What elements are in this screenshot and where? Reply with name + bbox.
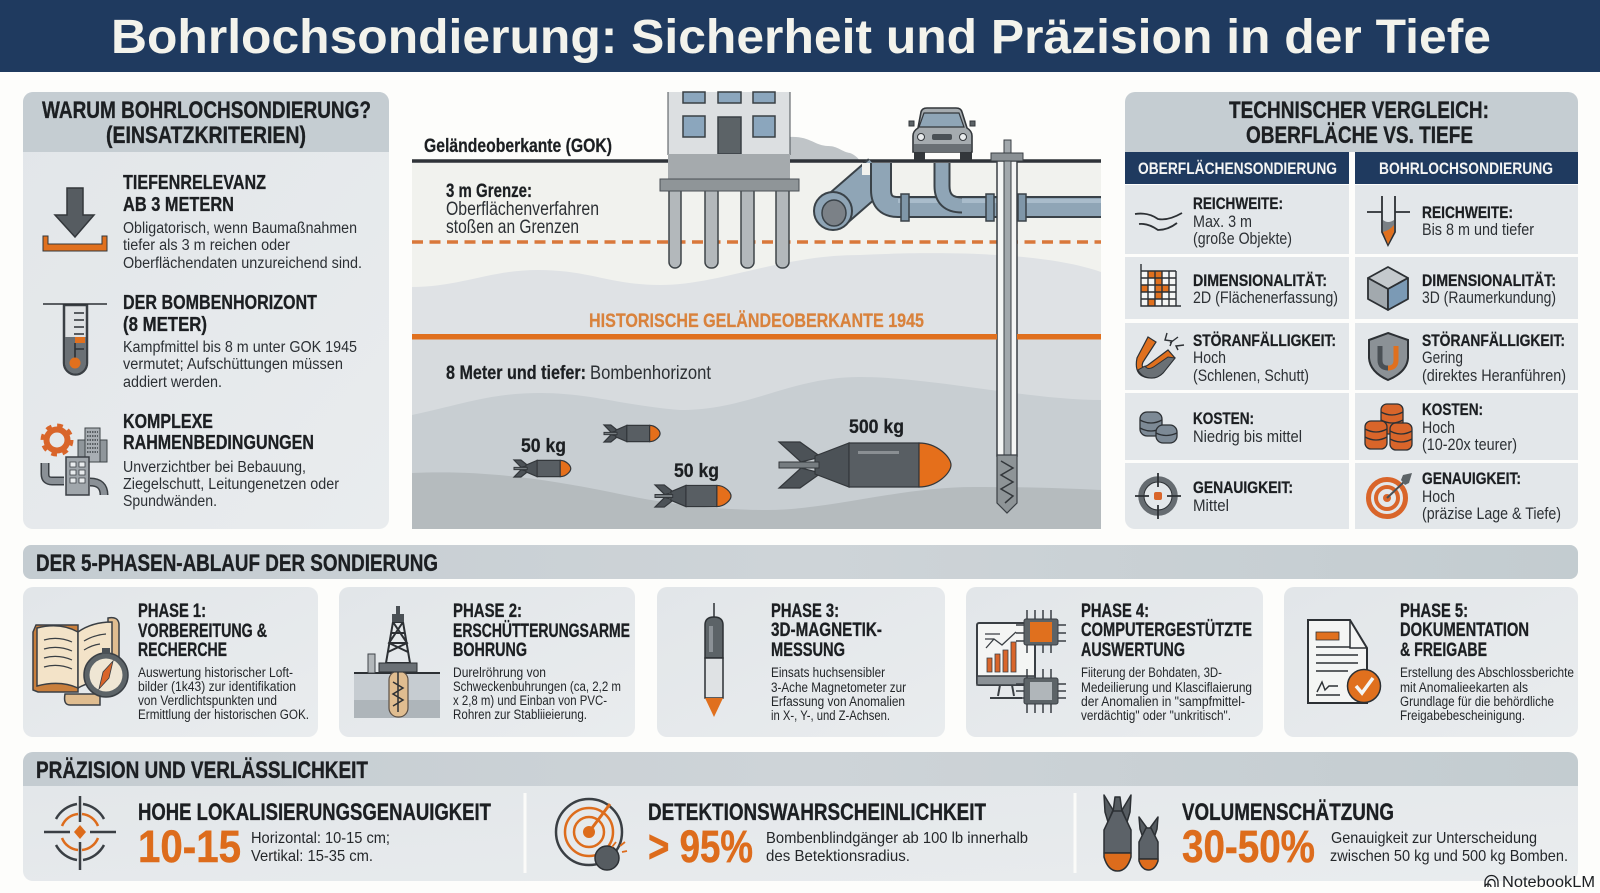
row: reichweite borehole <box>1422 204 1534 239</box>
text: phase 5: Freigabebescheinigung. <box>1400 708 1525 723</box>
label: 3 m grenze: stoßen an Grenzen <box>446 217 579 238</box>
text: komplexe rahmenbedingungen: RAHMENBEDINGUNGEN <box>123 432 314 454</box>
panel: technischer vergleich <box>1125 92 1578 529</box>
text: tiefenrelevanz <box>123 172 362 272</box>
section band: 5-phasen-ablauf <box>23 545 1578 579</box>
stat: detektionswahrscheinlichkeit: DETEKTIONSWAHRSCHEINLICHKEIT <box>648 799 986 826</box>
text: phase 1: PHASE 1: <box>138 601 206 622</box>
card: phase 3 <box>657 587 945 737</box>
text: phase 4: verdächtig" oder "unkritisch". <box>1081 708 1231 723</box>
text: phase 5: PHASE 5: <box>1400 601 1468 622</box>
text: phase 1: VORBEREITUNG & <box>138 621 267 642</box>
panel: praezision und verlaesslichkeit <box>23 752 1578 881</box>
row: stoeranfaelligkeit borehole <box>1422 331 1566 385</box>
text: bombenhorizont <box>123 292 357 391</box>
row: dimensionalitaet borehole: DIMENSIONALITÄT: <box>1422 272 1556 290</box>
stat: lokalisierungsgenauigkeit: HOHE LOKALISIERUNGSGENAUIGKEIT <box>138 799 491 826</box>
text: phase 4: COMPUTERGESTÜTZTE <box>1081 620 1252 641</box>
table row backgrounds <box>1125 185 1578 529</box>
text: phase 5: Grundlage für die behördliche <box>1400 694 1554 709</box>
text: phase 3: 3-Ache Magnetometer zur <box>771 680 906 695</box>
bomb large with label: 500 kg <box>849 417 904 438</box>
text: komplexe rahmenbedingungen <box>123 411 339 510</box>
label: 3 m grenze <box>446 181 599 238</box>
car on surface <box>909 108 975 160</box>
row: reichweite surface: REICHWEITE: <box>1193 195 1283 213</box>
bomb small top <box>604 425 660 442</box>
row: genauigkeit surface: Mittel <box>1193 497 1229 515</box>
bomb small left with label: 50 kg <box>521 436 566 457</box>
brand: notebooklm: NotebookLM <box>1502 874 1595 891</box>
icon: two bombs <box>1104 795 1158 871</box>
text: phase 3: 3D-MAGNETIK- <box>771 620 882 641</box>
stat: volumenschaetzung: Genauigkeit zur Unterscheidung <box>1331 830 1537 847</box>
row: kosten borehole: KOSTEN: <box>1422 401 1483 419</box>
text: tiefenrelevanz: Obligatorisch, wenn Baumaßnahmen <box>123 220 357 237</box>
panel: ground cross-section <box>412 92 1101 529</box>
icon: radar with bomb <box>556 799 627 870</box>
icon: crosshair target <box>1135 473 1181 519</box>
icon: orange coins <box>1365 404 1412 450</box>
row: dimensionalitaet borehole: 3D (Raumerkundung) <box>1422 289 1556 307</box>
label: 3 m grenze: Oberflächenverfahren <box>446 199 599 220</box>
stat: detektionswahrscheinlichkeit: > 95% <box>648 821 753 872</box>
icon: book and compass <box>33 618 128 705</box>
stat: detektionswahrscheinlichkeit: Bombenblindgänger ab 100 lb innerhalb <box>766 830 1028 847</box>
label: bombenhorizont: 8 Meter und tiefer: <box>446 363 586 384</box>
stat: lokalisierungsgenauigkeit <box>138 799 491 872</box>
text: tiefenrelevanz: TIEFENRELEVANZ <box>123 172 266 194</box>
ground surface line <box>412 159 1101 163</box>
label: 3 m grenze: 3 m Grenze: <box>446 181 532 202</box>
text: tiefenrelevanz: Oberflächendaten unzureichend sind. <box>123 255 362 272</box>
text: tiefenrelevanz: tiefer als 3 m reichen oder <box>123 237 290 254</box>
text: phase 5: & FREIGABE <box>1400 640 1487 661</box>
text: bombenhorizont: DER BOMBENHORIZONT <box>123 292 317 314</box>
icon: surface waves <box>1135 213 1182 230</box>
column header: bohrlochsondierung <box>1355 152 1578 184</box>
text: phase 3: Erfassung von Anomalien <box>771 694 905 709</box>
row: kosten surface: KOSTEN: <box>1193 410 1254 428</box>
icon: grey coins <box>1140 412 1177 443</box>
text: bombenhorizont: Kampfmittel bis 8 m unter GOK 1945 <box>123 339 357 356</box>
row: kosten borehole <box>1422 401 1517 454</box>
heading: praezision: PRÄZISION UND VERLÄSSLICHKEIT <box>36 757 368 784</box>
panel: warum bohrlochsondierung <box>23 92 389 529</box>
text: tiefenrelevanz: AB 3 METERN <box>123 194 234 216</box>
title banner: Bohrlochsondierung: Sicherheit und Präzision in der Tiefe <box>111 11 1491 64</box>
heading: vergleich: TECHNISCHER VERGLEICH: <box>1229 97 1489 124</box>
row: stoeranfaelligkeit borehole: Gering <box>1422 349 1463 367</box>
label: historische gelaendeoberkante: HISTORISCHE GELÄNDEOBERKANTE 1945 <box>589 311 924 332</box>
text: phase 4: Fiiterung der Bohdaten, 3D- <box>1081 665 1222 680</box>
row: dimensionalitaet borehole <box>1422 272 1556 307</box>
icon: drilling rig <box>354 606 440 718</box>
row: genauigkeit surface <box>1193 479 1293 515</box>
text: phase 4 <box>1081 601 1252 723</box>
text: phase 3: MESSUNG <box>771 640 845 661</box>
text: phase 1: RECHERCHE <box>138 640 227 661</box>
icon: magnet in shield <box>1369 333 1408 380</box>
label: bombenhorizont: Bombenhorizont <box>590 363 712 384</box>
row: stoeranfaelligkeit borehole: STÖRANFÄLLIGKEIT: <box>1422 331 1565 350</box>
heading: einsatzkriterien: WARUM BOHRLOCHSONDIERUNG? <box>42 97 371 124</box>
text: komplexe rahmenbedingungen: KOMPLEXE <box>123 411 213 433</box>
text: phase 2: Schweckenbuhrungen (ca, 2,2 m <box>453 679 621 694</box>
text: phase 2 <box>453 601 630 722</box>
label: bombenhorizont <box>446 363 712 384</box>
text: phase 4: PHASE 4: <box>1081 601 1149 622</box>
bomb small middle with label <box>655 461 731 507</box>
stat: volumenschaetzung: zwischen 50 kg und 500 kg Bomben. <box>1330 848 1568 865</box>
row: genauigkeit borehole <box>1422 470 1561 523</box>
row: reichweite borehole: Bis 8 m und tiefer <box>1422 221 1534 239</box>
text: phase 5: DOKUMENTATION <box>1400 620 1529 641</box>
stat: lokalisierungsgenauigkeit: Horizontal: 10-15 cm; <box>251 830 390 847</box>
row: genauigkeit borehole: GENAUIGKEIT: <box>1422 470 1521 488</box>
utility pipes <box>814 163 1101 230</box>
text: phase 3: in X-, Y-, und Z-Achsen. <box>771 708 890 723</box>
dividers <box>525 793 1075 873</box>
row: genauigkeit borehole: (präzise Lage & Tiefe) <box>1422 505 1561 523</box>
stat: detektionswahrscheinlichkeit <box>648 799 1028 872</box>
text: phase 3: Einsats huchsensibler <box>771 665 885 680</box>
text: phase 2: ERSCHÜTTERUNGSARME <box>453 621 630 642</box>
card: phase 5 <box>1284 587 1578 737</box>
row: reichweite borehole: REICHWEITE: <box>1422 204 1513 222</box>
column header: oberflaechensondierung: OBERFLÄCHENSONDIERUNG <box>1138 159 1337 178</box>
heading: einsatzkriterien: (EINSATZKRITERIEN) <box>106 122 306 149</box>
text: phase 1: Auswertung historischer Loft- <box>138 665 293 680</box>
icon: probe in borehole <box>1367 196 1410 245</box>
text: phase 5: Erstellung des Abschlossberichte <box>1400 665 1574 680</box>
row: reichweite surface: Max. 3 m <box>1193 213 1252 231</box>
icon: document with checkmark <box>1308 620 1380 703</box>
row: dimensionalitaet surface: DIMENSIONALITÄT: <box>1193 272 1327 290</box>
column header: oberflaechensondierung <box>1125 152 1349 184</box>
text: phase 5: mit Anomalieekarten als <box>1400 680 1528 695</box>
icon: orange target with arrow <box>1368 473 1412 516</box>
section band: 5-phasen-ablauf: DER 5-PHASEN-ABLAUF DER SONDIERUNG <box>36 550 438 577</box>
row: stoeranfaelligkeit borehole: (direktes Heranführen) <box>1422 367 1566 385</box>
icon: magnet with interference <box>1136 333 1184 378</box>
text: phase 4: Medeilierung und Klasciflaierung <box>1081 680 1252 695</box>
stat: volumenschaetzung: VOLUMENSCHÄTZUNG <box>1182 799 1394 826</box>
icon: 3d cube <box>1368 267 1408 310</box>
row: dimensionalitaet surface <box>1193 272 1338 307</box>
icon: magnetometer probe <box>705 603 723 717</box>
row: stoeranfaelligkeit surface: STÖRANFÄLLIGKEIT: <box>1193 331 1336 350</box>
icon: crosshair <box>44 796 116 870</box>
text: komplexe rahmenbedingungen: Spundwänden. <box>123 493 217 510</box>
text: phase 1: bilder (1k43) zur identifikation <box>138 679 296 694</box>
icon: arrow down to tray <box>43 188 107 251</box>
text: phase 2: x 2,8 m) und Einban von PVC- <box>453 693 607 708</box>
borehole with probe and drill <box>991 140 1023 513</box>
row: kosten surface <box>1193 410 1302 446</box>
text: phase 5 <box>1400 601 1574 723</box>
bomb large with label <box>779 417 951 488</box>
heading: einsatzkriterien <box>42 97 371 149</box>
stat: lokalisierungsgenauigkeit: Vertikal: 15-35 cm. <box>251 848 373 865</box>
column header: bohrlochsondierung: BOHRLOCHSONDIERUNG <box>1379 159 1553 178</box>
label: gelaendeoberkante: Geländeoberkante (GOK) <box>424 136 612 157</box>
row: stoeranfaelligkeit surface: (Schlenen, Schutt) <box>1193 367 1309 385</box>
row: stoeranfaelligkeit surface <box>1193 331 1336 385</box>
icon: borehole depth gauge <box>43 304 107 374</box>
stat: volumenschaetzung: 30-50% <box>1182 821 1315 872</box>
row: reichweite surface <box>1193 195 1292 248</box>
text: komplexe rahmenbedingungen: Ziegelschutt, Leitungenetzen oder <box>123 476 339 493</box>
card: phase 2 <box>339 587 635 737</box>
text: phase 3: PHASE 3: <box>771 601 839 622</box>
building with pile foundation <box>660 92 799 268</box>
row: stoeranfaelligkeit surface: Hoch <box>1193 349 1226 367</box>
title banner <box>0 0 1600 72</box>
text: phase 1: Ermittlung der historischen GOK. <box>138 707 309 722</box>
text: phase 2: Rohren zur Stabliieierung. <box>453 707 587 722</box>
text: phase 3 <box>771 601 906 723</box>
card: phase 4 <box>966 587 1263 737</box>
text: bombenhorizont: (8 METER) <box>123 314 207 336</box>
dashed 3 m line <box>412 240 1101 244</box>
historic ground level line <box>412 334 1101 340</box>
row: dimensionalitaet surface: 2D (Flächenerfassung) <box>1193 289 1338 307</box>
row: kosten surface: Niedrig bis mittel <box>1193 428 1302 446</box>
heading: vergleich: OBERFLÄCHE VS. TIEFE <box>1246 122 1473 149</box>
row: kosten borehole: Hoch <box>1422 419 1455 437</box>
stat: lokalisierungsgenauigkeit: 10-15 <box>138 821 241 872</box>
bomb small left with label <box>514 436 571 477</box>
heading: vergleich <box>1229 97 1489 149</box>
text: bombenhorizont: addiert werden. <box>123 374 222 391</box>
text: phase 1 <box>138 601 309 722</box>
row: reichweite surface: (große Objekte) <box>1193 230 1292 248</box>
hill silhouette <box>790 137 860 161</box>
text: phase 2: BOHRUNG <box>453 640 527 661</box>
text: phase 4: der Anomalien in "sampfmittel- <box>1081 694 1245 709</box>
text: phase 1: von Verdlichtspunkten und <box>138 693 277 708</box>
stat: volumenschaetzung <box>1182 799 1568 872</box>
row: genauigkeit surface: GENAUIGKEIT: <box>1193 479 1293 497</box>
stat: detektionswahrscheinlichkeit: des Betektionsradius. <box>766 848 910 865</box>
icon: monitor and chips <box>977 610 1066 713</box>
card: phase 1 <box>23 587 318 737</box>
text: phase 4: AUSWERTUNG <box>1081 640 1185 661</box>
icon: 2d grid <box>1141 264 1181 306</box>
text: phase 2: PHASE 2: <box>453 601 522 622</box>
text: bombenhorizont: vermutet; Aufschüttungen müssen <box>123 356 343 373</box>
text: phase 2: Durelröhrung von <box>453 665 546 680</box>
icon: gear, buildings and pipes <box>43 426 107 495</box>
row: genauigkeit borehole: Hoch <box>1422 488 1455 506</box>
text: komplexe rahmenbedingungen: Unverzichtber bei Bebauung, <box>123 459 306 476</box>
bomb small middle with label: 50 kg <box>674 461 719 482</box>
row: kosten borehole: (10-20x teurer) <box>1422 436 1517 454</box>
